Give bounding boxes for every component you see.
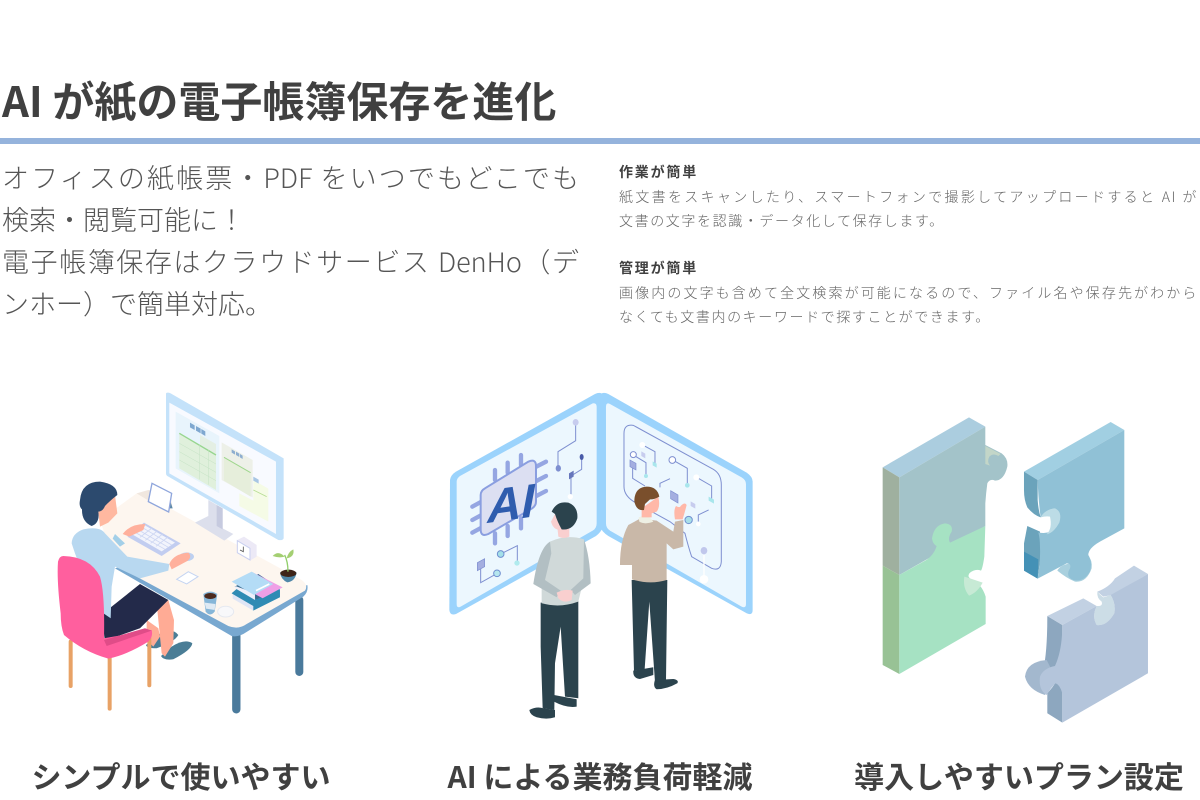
books <box>232 572 283 611</box>
coffee cup <box>203 592 234 617</box>
person: man in beige sweater <box>620 487 687 689</box>
caption: AI: AI による業務負荷軽減 <box>447 753 753 797</box>
text block: easy management: 画像内の文字も含めて全文検索が可能になるので、ファイル名や保存先がわから <box>619 282 1198 302</box>
AI chip icon <box>472 455 546 543</box>
text block: easy work: 文書の文字を認識・データ化して保存します。 <box>619 211 945 231</box>
person: man in grey sweater <box>529 502 591 719</box>
blue puzzle piece <box>1024 422 1124 582</box>
circuit lines <box>481 423 721 583</box>
text block: easy work <box>619 162 1198 231</box>
lavender puzzle piece <box>1025 566 1148 723</box>
keyboard <box>127 523 181 556</box>
joined puzzle piece <box>883 417 1007 674</box>
lead text: 検索・閲覧可能に！ <box>2 199 245 238</box>
left panel <box>449 393 603 614</box>
illustration: woman working at desk <box>58 393 308 709</box>
desk legs <box>236 600 299 709</box>
chair <box>58 556 152 709</box>
text block: easy work: 紙文書をスキャンしたり、スマートフォンで撮影してアップロードすると AI が <box>619 186 1198 206</box>
text block: easy management <box>619 258 1198 327</box>
right panel <box>600 393 753 614</box>
caption: plan: 導入しやすいプラン設定 <box>854 753 1184 797</box>
person: woman <box>72 482 192 660</box>
text block: easy management: 管理が簡単 <box>619 258 698 278</box>
desk <box>100 493 308 636</box>
title: AI が紙の電子帳簿保存を進化 <box>2 69 556 130</box>
plant <box>273 549 297 582</box>
lead text: 電子帳簿保存はクラウドサービス DenHo（デ <box>2 241 579 280</box>
circuit nodes <box>477 419 714 584</box>
title underline <box>0 138 1200 144</box>
text block: easy management: なくても文書内のキーワードで探すことができます。 <box>619 307 991 327</box>
text block: easy work: 作業が簡単 <box>619 162 698 182</box>
caption: simple: シンプルで使いやすい <box>31 753 331 797</box>
illustration: two men at AI panels <box>449 393 753 719</box>
lead text: ンホー）で簡単対応。 <box>2 283 272 322</box>
lead text <box>2 157 579 322</box>
monitor <box>166 393 284 541</box>
lead text: オフィスの紙帳票・PDF をいつでもどこでも <box>2 157 579 196</box>
clock <box>237 537 257 561</box>
mouse and phone <box>177 552 198 584</box>
illustration: puzzle pieces <box>883 417 1148 723</box>
AI chip icon: AI <box>486 474 536 534</box>
desk calendar <box>137 483 173 512</box>
